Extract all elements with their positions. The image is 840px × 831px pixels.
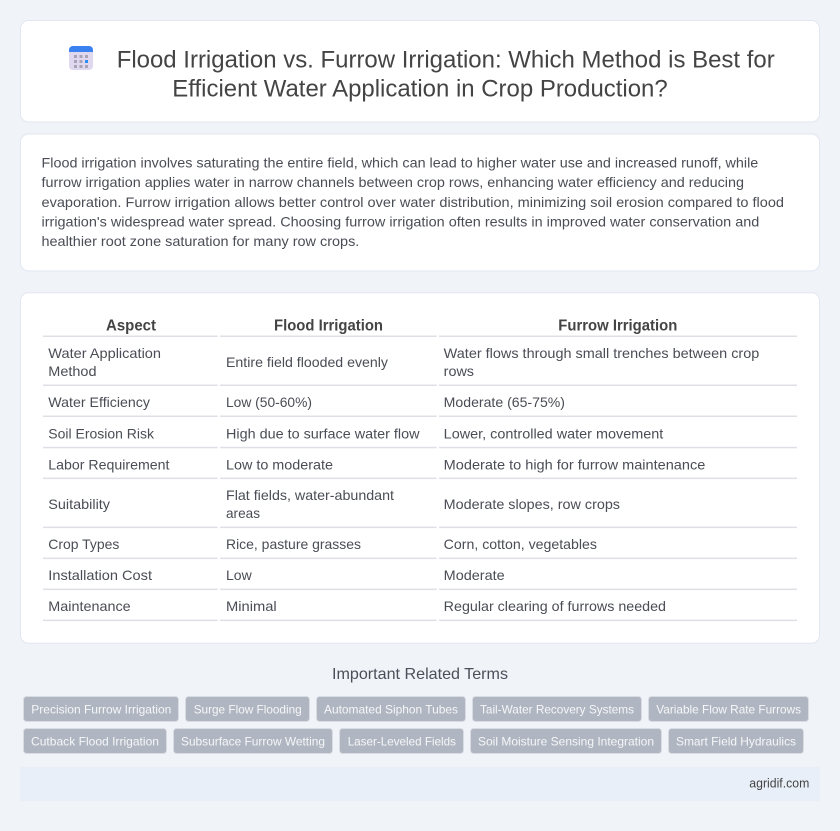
table row: installation cost xyxy=(43,567,797,590)
table row: crop types: Rice, pasture grasses xyxy=(226,536,361,552)
table header row: Flood Irrigation xyxy=(274,318,383,335)
tag: laser-leveled fields xyxy=(340,728,464,754)
text block: introduction paragraph: evaporation. Furrow irrigation allows better control over water distribution, minimizing soil erosion compared to flood xyxy=(42,194,784,210)
tag: soil moisture sensing integration: Soil Moisture Sensing Integration xyxy=(478,734,654,748)
text block: introduction paragraph: Flood irrigation involves saturating the entire field, which can lead to higher water use and increased runoff, while xyxy=(42,155,759,171)
tag: subsurface furrow wetting: Subsurface Furrow Wetting xyxy=(181,734,325,748)
tag: tail-water recovery systems xyxy=(472,696,642,722)
panel: comparison table xyxy=(20,293,820,643)
tag: variable flow rate furrows: Variable Flow Rate Furrows xyxy=(656,702,801,716)
footer xyxy=(20,767,820,801)
tag: cutback flood irrigation: Cutback Flood Irrigation xyxy=(31,734,159,748)
table row: water application method: rows xyxy=(444,363,474,379)
text block: introduction paragraph: furrow irrigation applies water in narrow channels between crop rows, enhancing water efficiency and reducing xyxy=(42,174,744,190)
tag: variable flow rate furrows xyxy=(648,696,808,722)
text block: introduction paragraph: healthier root zone saturation for many row crops. xyxy=(42,233,359,249)
tag: precision furrow irrigation xyxy=(24,696,178,722)
table row: maintenance: Regular clearing of furrows needed xyxy=(444,598,666,614)
table row: labor requirement: Low to moderate xyxy=(226,456,333,472)
table row: labor requirement xyxy=(43,456,797,479)
tag: surge flow flooding: Surge Flow Flooding xyxy=(194,702,302,716)
table row: water efficiency: Moderate (65-75%) xyxy=(444,394,565,410)
table row: labor requirement: Moderate to high for furrow maintenance xyxy=(444,456,706,472)
tag: soil moisture sensing integration xyxy=(470,728,662,754)
table row: installation cost: Moderate xyxy=(444,567,505,583)
table row: water efficiency: Low (50-60%) xyxy=(226,394,312,410)
tag: subsurface furrow wetting xyxy=(174,728,332,754)
tag: automated siphon tubes xyxy=(316,696,466,722)
table header row xyxy=(43,318,797,337)
title: Efficient Water Application in Crop Production? xyxy=(172,76,668,103)
tag: tail-water recovery systems: Tail-Water Recovery Systems xyxy=(480,702,634,716)
table row: suitability: Suitability xyxy=(48,496,110,512)
table row: water application method: Entire field flooded evenly xyxy=(226,354,388,370)
text block: introduction paragraph: irrigation's widespread water spread. Choosing furrow irrigation often results in improved water conservation and xyxy=(42,213,759,229)
table row: crop types: Crop Types xyxy=(48,536,119,552)
tag: automated siphon tubes: Automated Siphon Tubes xyxy=(324,702,458,716)
table row: labor requirement: Labor Requirement xyxy=(48,456,170,472)
title xyxy=(117,46,775,103)
text block: introduction paragraph xyxy=(42,155,784,249)
table row: soil erosion risk: High due to surface water flow xyxy=(226,425,420,441)
heading: important related terms: Important Related Terms xyxy=(332,666,508,683)
table row: soil erosion risk xyxy=(43,425,797,448)
table row: water efficiency xyxy=(43,394,797,417)
tag: laser-leveled fields: Laser-Leveled Fields xyxy=(348,734,456,748)
table row: suitability: Flat fields, water-abundant xyxy=(226,487,394,503)
table row: water application method xyxy=(43,345,797,386)
related terms tags xyxy=(24,696,808,754)
tag: surge flow flooding xyxy=(186,696,310,722)
table row: soil erosion risk: Soil Erosion Risk xyxy=(48,425,155,441)
panel: introduction xyxy=(20,134,820,271)
table row: suitability: areas xyxy=(226,505,260,521)
tag: cutback flood irrigation xyxy=(24,728,166,754)
table row: maintenance xyxy=(43,598,797,621)
table header row: Furrow Irrigation xyxy=(558,318,677,335)
tag: smart field hydraulics xyxy=(668,728,804,754)
table row: maintenance: Minimal xyxy=(226,598,277,614)
table row: maintenance: Maintenance xyxy=(48,598,131,614)
table row: installation cost: Installation Cost xyxy=(48,567,152,583)
icon: calendar xyxy=(69,46,93,70)
table row: water application method: Water flows through small trenches between crop xyxy=(444,345,760,361)
table row: water application method: Method xyxy=(48,363,96,379)
table row: water application method: Water Application xyxy=(48,345,161,361)
tag: precision furrow irrigation: Precision Furrow Irrigation xyxy=(31,702,171,716)
panel: header xyxy=(20,20,820,122)
title: Flood Irrigation vs. Furrow Irrigation: Which Method is Best for xyxy=(117,46,775,73)
table row: crop types: Corn, cotton, vegetables xyxy=(444,536,597,552)
table row: water efficiency: Water Efficiency xyxy=(48,394,150,410)
tag: smart field hydraulics: Smart Field Hydraulics xyxy=(676,734,796,748)
table row: crop types xyxy=(43,536,797,559)
table row: suitability: Moderate slopes, row crops xyxy=(444,496,620,512)
footer: agridif.com xyxy=(749,776,809,791)
table row: suitability xyxy=(43,487,797,528)
table row: installation cost: Low xyxy=(226,567,253,583)
table row: soil erosion risk: Lower, controlled water movement xyxy=(444,425,663,441)
table header row: Aspect xyxy=(106,318,156,335)
